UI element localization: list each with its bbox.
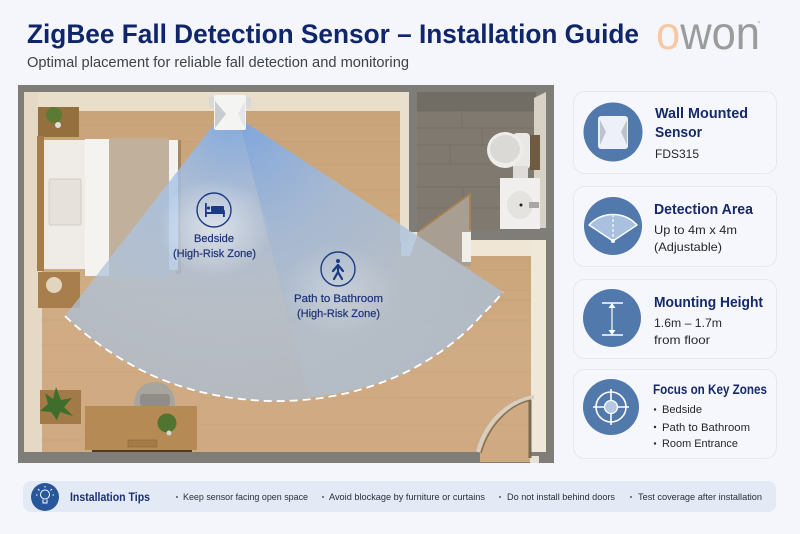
panel: wall mounted sensor: FDS315: [655, 147, 699, 161]
panel: mounting height: [574, 280, 776, 358]
panel: detection area: Detection Area: [654, 202, 754, 218]
floor plan: [18, 85, 554, 463]
nightstand with lamp: [38, 272, 80, 308]
title: ZigBee Fall Detection Sensor – Installation Guide: [27, 19, 639, 49]
installation tips bar: Test coverage after installation: [638, 492, 762, 502]
zone label: path to bathroom: [294, 252, 383, 320]
zone label: path to bathroom: Path to Bathroom: [294, 293, 383, 305]
panel: detection area: Up to 4m x 4m: [654, 223, 737, 237]
panel: focus on key zones: Focus on Key Zones: [653, 382, 767, 397]
divider wall: [400, 92, 409, 242]
installation tips bar: Keep sensor facing open space: [183, 492, 308, 502]
sink: [500, 178, 540, 229]
panel: focus on key zones: [574, 370, 776, 458]
plant stand: [40, 387, 81, 424]
sensor on wall: [209, 95, 251, 130]
zone label: path to bathroom: (High-Risk Zone): [297, 308, 380, 320]
icon: walking person: [333, 259, 343, 279]
panel: detection area: [574, 186, 776, 266]
panel: wall mounted sensor: Sensor: [655, 125, 702, 141]
nightstand with plant: [38, 107, 79, 137]
installation tips bar: Installation Tips: [70, 492, 150, 504]
toilet: [487, 132, 540, 179]
icon: detection fan: [584, 197, 642, 255]
walls outer: [18, 85, 554, 463]
bed: [37, 136, 181, 277]
panel: focus on key zones: Path to Bathroom: [662, 422, 750, 434]
dashed range arc: [65, 292, 503, 401]
logo: OWON: owon: [656, 7, 760, 59]
panel: wall mounted sensor: Wall Mounted: [655, 106, 748, 122]
glass partition: [417, 193, 471, 266]
desk: [85, 406, 197, 452]
zone label: bedside: (High-Risk Zone): [173, 248, 256, 260]
bathroom: [417, 92, 536, 232]
icon: target: [583, 379, 639, 435]
zone label: bedside: [173, 193, 256, 260]
bottom wall and doorway: [480, 452, 530, 462]
panel: detection area: (Adjustable): [654, 240, 722, 254]
installation tips bar: Do not install behind doors: [507, 492, 615, 502]
panel: focus on key zones: Room Entrance: [662, 438, 738, 450]
door: [478, 397, 534, 458]
panel: focus on key zones: Bedside: [662, 404, 702, 416]
detection beam: [65, 122, 503, 401]
floor: wood: [42, 111, 400, 452]
subtitle: Optimal placement for reliable fall detection and monitoring: [27, 55, 409, 71]
panel: mounting height: from floor: [654, 333, 710, 347]
chair: [134, 382, 175, 406]
icon: height arrow: [583, 289, 641, 347]
panel: wall mounted sensor: [574, 92, 776, 174]
main room wall tops: [24, 92, 409, 452]
icon: bed: [205, 203, 225, 217]
panel: mounting height: 1.6m – 1.7m: [654, 316, 722, 330]
installation tips bar: [23, 481, 776, 512]
beam: left sector: [65, 123, 308, 401]
beam: right sector: [240, 122, 503, 398]
zone label: bedside: Bedside: [194, 233, 234, 245]
icon: sensor: [584, 102, 642, 162]
right room walls: [471, 230, 554, 240]
installation tips bar: Avoid blockage by furniture or curtains: [329, 492, 485, 502]
icon: light bulb: [31, 483, 59, 511]
panel: mounting height: Mounting Height: [654, 295, 763, 311]
